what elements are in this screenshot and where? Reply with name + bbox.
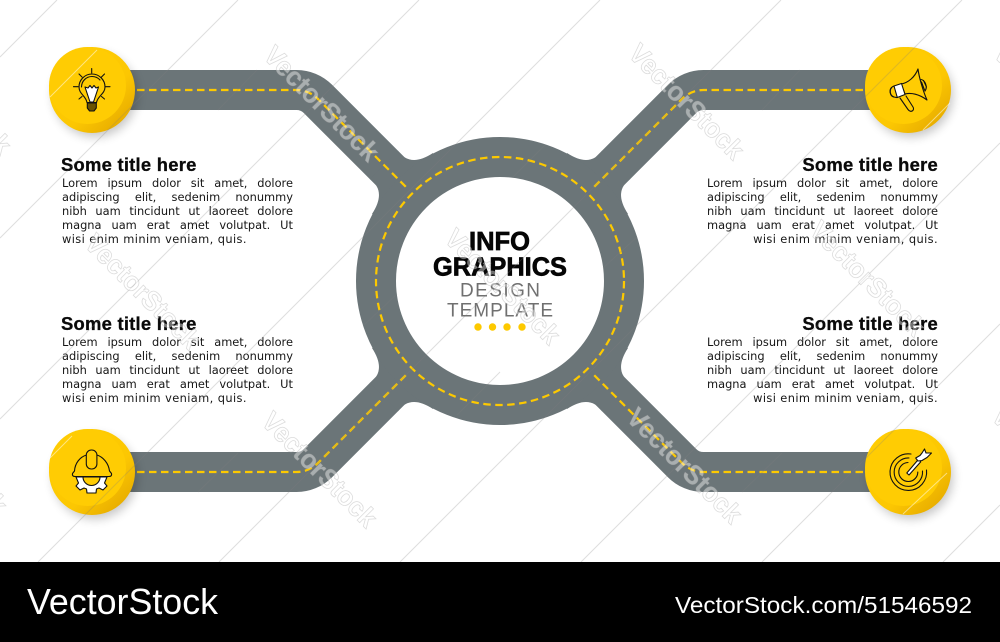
text block: bottom right: magna uam erat amet volutpat. Ut xyxy=(707,377,938,391)
text block: bottom left: Lorem ipsum dolor sit amet, dolore xyxy=(62,335,293,349)
text block: top right: Lorem ipsum dolor sit amet, dolore xyxy=(707,176,938,190)
text block: top right: magna uam erat amet volutpat. Ut xyxy=(707,218,938,232)
text block: bottom left: wisi enim minim veniam, quis. xyxy=(62,391,247,405)
subheading: design template xyxy=(447,280,553,322)
button: idea bulb xyxy=(49,47,137,137)
watermark words: VectorStock xyxy=(439,223,567,351)
footer brand name: VectorStock xyxy=(27,581,219,622)
text block: top left: nibh uam tincidunt ut laoreet dolore xyxy=(62,204,293,218)
text block: bottom left: adipiscing elit, sedenim nonummy xyxy=(62,349,293,363)
icon: engineer helmet over gear xyxy=(72,450,112,493)
text block: top left: adipiscing elit, sedenim nonummy xyxy=(62,190,293,204)
text block: bottom left xyxy=(61,313,293,405)
junction fillets xyxy=(370,151,630,411)
footer image id: VectorStock.com/51546592 xyxy=(675,592,972,618)
button: helmet and gear xyxy=(49,429,137,519)
icon: target and dart xyxy=(890,449,932,490)
text block: top right xyxy=(707,154,938,246)
watermark words xyxy=(0,33,1000,534)
subheading: design template: TEMPLATE xyxy=(447,300,553,322)
text block: top left: magna uam erat amet volutpat. Ut xyxy=(62,218,293,232)
text block: top right: nibh uam tincidunt ut laoreet dolore xyxy=(707,204,938,218)
text block: bottom left: nibh uam tincidunt ut laoreet dolore xyxy=(62,363,293,377)
road: bottom left xyxy=(130,371,410,472)
text block: bottom right xyxy=(707,313,938,405)
text block: bottom right: nibh uam tincidunt ut laoreet dolore xyxy=(707,363,938,377)
text block: top left: Lorem ipsum dolor sit amet, dolore xyxy=(62,176,293,190)
watermark words: VectorStock xyxy=(258,40,386,168)
yellow lane markings xyxy=(137,90,863,472)
heading: info graphics: GRAPHICS xyxy=(433,254,567,282)
icon: megaphone xyxy=(890,69,927,111)
watermark words: VectorStock xyxy=(623,38,751,166)
watermark words: VectorStock xyxy=(804,215,932,343)
text block: top right: Some title here xyxy=(802,154,938,175)
text block: bottom right: Some title here xyxy=(802,313,938,334)
text block: top left: wisi enim minim veniam, quis. xyxy=(62,232,247,246)
heading: info graphics xyxy=(433,228,567,282)
text block: bottom right: adipiscing elit, sedenim nonummy xyxy=(707,349,938,363)
button: megaphone xyxy=(865,47,953,137)
button: target with arrow xyxy=(865,429,953,519)
yellow dots xyxy=(474,323,526,331)
text block: bottom right: Lorem ipsum dolor sit amet, dolore xyxy=(707,335,938,349)
text block: top left xyxy=(61,154,293,246)
text block: bottom right: wisi enim minim veniam, quis. xyxy=(753,391,938,405)
text block: top left: Some title here xyxy=(61,154,197,175)
road: top left xyxy=(130,90,410,191)
road: bottom right xyxy=(590,371,870,472)
watermark words: VectorStock xyxy=(256,406,384,534)
text block: bottom left: magna uam erat amet volutpat. Ut xyxy=(62,377,293,391)
text block: bottom left: Some title here xyxy=(61,313,197,334)
text block: top right: wisi enim minim veniam, quis. xyxy=(753,232,938,246)
subheading: design template: DESIGN xyxy=(460,280,540,302)
road: top right xyxy=(590,90,870,191)
icon: light bulb xyxy=(74,68,110,111)
watermark words: VectorStock xyxy=(621,402,749,530)
watermark words: VectorStock xyxy=(79,228,207,356)
text block: top right: adipiscing elit, sedenim nonummy xyxy=(707,190,938,204)
light streaks across buttons xyxy=(50,50,950,514)
central ring road xyxy=(376,157,624,405)
heading: info graphics: INFO xyxy=(469,228,530,256)
